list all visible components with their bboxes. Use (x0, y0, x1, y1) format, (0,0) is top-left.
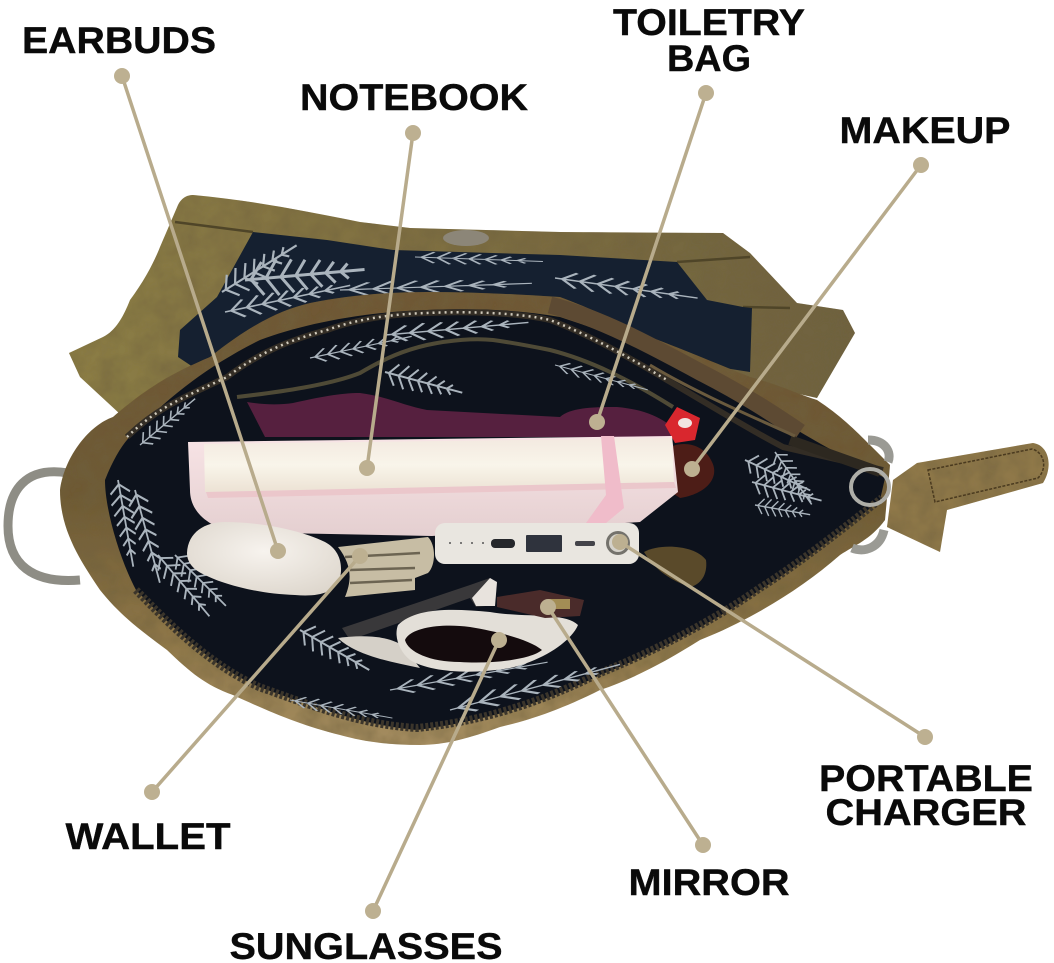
leader: sunglasses (373, 640, 499, 911)
dot: portable charger (917, 729, 933, 745)
dot: sunglasses end (491, 632, 507, 648)
label: portable charger: PORTABLE (819, 758, 1033, 799)
toiletry bag (247, 393, 672, 437)
sunglasses (338, 578, 578, 672)
dot: portable charger end (612, 534, 628, 550)
top zipper teeth (127, 312, 667, 437)
label: earbuds: EARBUDS (22, 20, 216, 61)
earbuds case (187, 522, 341, 595)
bag interior lining (105, 309, 885, 730)
label: notebook: NOTEBOOK (300, 77, 528, 118)
lining fern pattern (107, 314, 824, 724)
leader lines (122, 76, 925, 911)
leader dots (114, 68, 933, 919)
sunglasses lens (405, 626, 542, 662)
pocket seam right (650, 365, 795, 436)
dot: toiletry bag end (589, 414, 605, 430)
leader: notebook (367, 133, 413, 468)
magnetic snap (443, 230, 489, 246)
dot: notebook (405, 125, 421, 141)
dot: makeup end (684, 461, 700, 477)
flap lining fern pattern (215, 234, 699, 321)
leader: wallet (152, 556, 360, 792)
dot: earbuds end (270, 543, 286, 559)
inner pocket edge (237, 339, 673, 407)
dot: notebook end (359, 460, 375, 476)
makeup (668, 444, 714, 498)
zipper metal rings (851, 469, 889, 505)
sunglasses frame (396, 610, 578, 672)
bag body (60, 292, 890, 745)
label: makeup: MAKEUP (840, 110, 1010, 151)
leader: earbuds (122, 76, 278, 551)
zipper pull tab (851, 440, 1049, 552)
flap lining (178, 232, 752, 372)
dot: wallet end (352, 548, 368, 564)
red zipper tag (665, 407, 700, 443)
dot: sunglasses (365, 903, 381, 919)
right side thick rim (550, 305, 800, 432)
label: portable charger: CHARGER (826, 792, 1026, 833)
label: mirror: MIRROR (628, 862, 790, 903)
dot: toiletry bag (698, 85, 714, 101)
sunglasses far arm (342, 578, 497, 640)
bottom zipper (136, 498, 882, 728)
dot: mirror end (540, 599, 556, 615)
dot: mirror (695, 837, 711, 853)
mirror (497, 590, 584, 618)
label: toiletry bag (613, 2, 805, 79)
dot: wallet (144, 784, 160, 800)
sunglasses temple (338, 636, 420, 668)
leather strap piece (644, 547, 706, 587)
label: toiletry bag: TOILETRY (613, 2, 805, 43)
top zipper rail (127, 312, 883, 470)
dot: earbuds (114, 68, 130, 84)
portable charger (435, 523, 639, 564)
label: portable charger (819, 758, 1033, 833)
sunglasses arm tip (472, 578, 497, 606)
label: toiletry bag: BAG (667, 38, 751, 79)
flap stitch seam (175, 222, 790, 308)
zipper tail near pull (790, 440, 880, 472)
leader: toiletry bag (597, 93, 706, 422)
wallet (338, 537, 434, 597)
notebook elastic band (586, 436, 624, 523)
dot: makeup (913, 157, 929, 173)
zipper metal disks (852, 440, 889, 550)
label: wallet: WALLET (66, 816, 231, 857)
bag flap (69, 195, 855, 414)
notebook (188, 436, 678, 536)
leader: mirror (548, 607, 703, 845)
ring: left metal ring (8, 472, 80, 581)
leader: makeup (692, 165, 921, 469)
illustration: open leather bag (8, 195, 1049, 745)
leader: portable charger (620, 542, 925, 737)
